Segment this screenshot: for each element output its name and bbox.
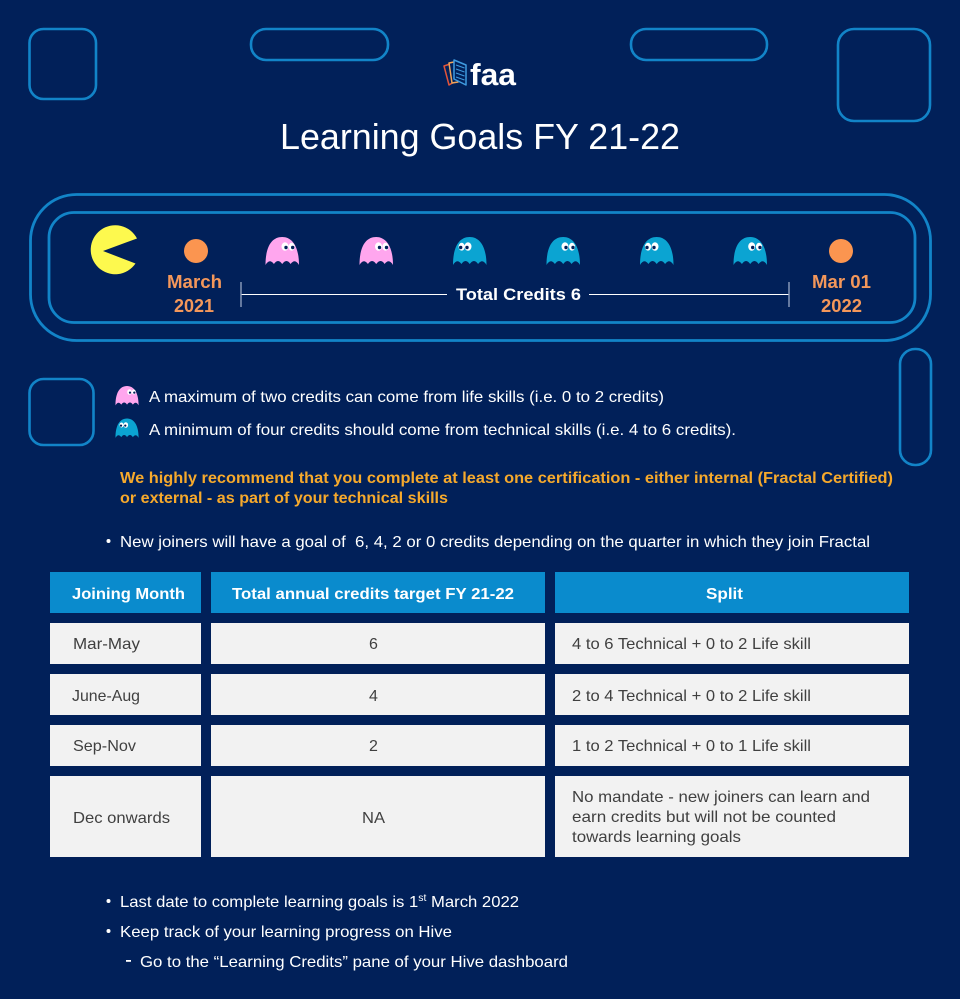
logo wordmark: faa (470, 57, 517, 92)
row: Dec onwards: earn credits but will not be counted (572, 809, 836, 826)
panel: timeline track (30, 194, 930, 340)
callout: certification recommendation: or external - as part of your technical skills (120, 490, 448, 507)
table header: Total annual credits target FY 21-22 (232, 586, 514, 603)
last date note: March 2022 (426, 894, 519, 911)
icon: books (444, 60, 466, 85)
icon: blue ghost (116, 418, 139, 438)
row: Dec onwards: towards learning goals (572, 829, 741, 846)
title: Learning Goals FY 21-22 (280, 116, 680, 157)
row: June-Aug (50, 674, 909, 715)
last date note: st (418, 893, 427, 904)
row: Mar-May: 6 (369, 636, 378, 653)
end date label: Mar 01 (812, 272, 871, 292)
row: Mar-May: 4 to 6 Technical + 0 to 2 Life skill (572, 636, 811, 653)
logo: faa (444, 57, 517, 92)
hive dashboard sub-note: Go to the “Learning Credits” pane of your Hive dashboard (140, 954, 568, 971)
table: joining month credits (50, 572, 909, 857)
table header: Split (706, 586, 744, 603)
callout: certification recommendation: We highly recommend that you complete at least one certification - either internal (Fractal Certified) (120, 470, 893, 487)
callout: certification recommendation (120, 470, 893, 507)
end dot (829, 239, 853, 263)
last date note (106, 893, 519, 911)
technical skills rule: A minimum of four credits should come from technical skills (i.e. 4 to 6 credits). (149, 422, 736, 439)
row: Sep-Nov: Sep-Nov (73, 738, 136, 755)
table header: Joining Month (72, 586, 185, 603)
row: Dec onwards: No mandate - new joiners can learn and (572, 789, 870, 806)
arrow: total credits span (241, 282, 789, 307)
last date note: Last date to complete learning goals is 1 (120, 894, 406, 911)
icon: pacman (91, 225, 137, 274)
start dot (184, 239, 208, 263)
row: June-Aug: 2 to 4 Technical + 0 to 2 Life skill (572, 688, 811, 705)
row: Sep-Nov: 1 to 2 Technical + 0 to 1 Life skill (572, 738, 811, 755)
start date label (167, 272, 222, 316)
row: Sep-Nov: 2 (369, 738, 378, 755)
row: June-Aug: 4 (369, 688, 378, 705)
new joiners note: New joiners will have a goal of 6, 4, 2 or 0 credits depending on the quarter in which they join Fractal (120, 534, 870, 551)
icon: blue ghosts (453, 237, 767, 265)
row: Mar-May (50, 623, 909, 664)
row: Dec onwards (50, 776, 909, 857)
table header (50, 572, 909, 613)
row: Sep-Nov (50, 725, 909, 766)
row: June-Aug: June-Aug (72, 688, 140, 705)
end date label: 2022 (821, 296, 862, 316)
row: Mar-May: Mar-May (73, 636, 140, 653)
start date label: March (167, 272, 222, 292)
total credits label: Total Credits 6 (456, 285, 581, 304)
row: Dec onwards: NA (362, 810, 385, 827)
icon: pink ghosts (266, 237, 393, 265)
row: Dec onwards: Dec onwards (73, 810, 170, 827)
end date label (812, 272, 871, 316)
hive tracking note: Keep track of your learning progress on Hive (120, 924, 452, 941)
start date label: 2021 (174, 296, 214, 316)
footer notes (106, 893, 568, 971)
icon: pink ghost (116, 386, 139, 405)
life skills rule: A maximum of two credits can come from life skills (i.e. 0 to 2 credits) (149, 389, 664, 406)
legend: credit rules (116, 386, 736, 439)
